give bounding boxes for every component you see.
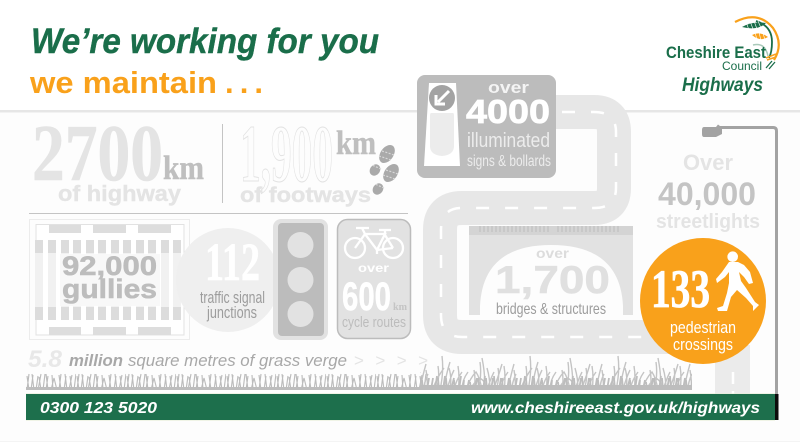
cycle label: cycle routes xyxy=(342,314,406,331)
sign label second line: signs & bollards xyxy=(467,153,551,170)
icon: traffic light xyxy=(273,219,328,340)
junctions number: 112 xyxy=(205,232,260,292)
panel: bridges and structures xyxy=(469,226,633,318)
icon: bollard xyxy=(424,83,460,166)
footer bar xyxy=(26,394,775,420)
sign number: 4000 xyxy=(466,93,550,130)
stat: streetlights: Over xyxy=(683,150,733,175)
gullies number: 92,000 xyxy=(62,251,157,281)
verge label: square metres of grass verge xyxy=(128,351,347,370)
stat: streetlights xyxy=(656,150,760,233)
highway unit: km xyxy=(163,150,204,187)
bridges label: bridges & structures xyxy=(496,301,606,318)
crossings label second line: crossings xyxy=(673,335,733,354)
footer phone: 0300 123 5020 xyxy=(40,400,157,417)
stat: grass verge: 5.8 xyxy=(28,346,63,373)
bridges over: over xyxy=(536,245,570,261)
stat: highway length: 2700 xyxy=(32,110,163,198)
crossings number: 133 xyxy=(651,259,710,319)
road graphic xyxy=(440,112,750,394)
logo wordmark: Cheshire East xyxy=(666,44,766,62)
icon: footprints xyxy=(367,142,402,197)
logo: Cheshire East Council Highways xyxy=(666,17,779,96)
panel: pedestrian crossings xyxy=(640,238,766,364)
icon: walking person xyxy=(716,251,759,311)
sign label: illuminated xyxy=(467,130,550,152)
crossings label: pedestrian xyxy=(670,318,736,337)
bridges number: 1,700 xyxy=(495,259,610,302)
divider xyxy=(222,124,223,203)
footway unit: km xyxy=(336,125,376,162)
logo highways: Highways xyxy=(682,75,763,96)
logo council: Council xyxy=(722,59,762,73)
junctions label: traffic signal xyxy=(200,288,265,307)
panel: cycle routes xyxy=(338,220,410,338)
streetlights number: 40,000 xyxy=(658,176,756,212)
section rule xyxy=(29,213,408,214)
panel: illuminated signs and bollards xyxy=(417,75,556,178)
cycle over: over xyxy=(358,261,389,275)
grate frame xyxy=(36,224,184,335)
gullies label: gullies xyxy=(62,274,157,304)
footer url: www.cheshireeast.gov.uk/highways xyxy=(471,400,760,417)
subtitle: . . . xyxy=(225,65,263,100)
icon: bicycle xyxy=(345,228,403,258)
verge emphasis: million xyxy=(69,351,123,370)
panel: gullies xyxy=(30,220,190,340)
subtitle: we maintain xyxy=(29,65,217,100)
grass strip xyxy=(26,354,692,390)
stat: footway length: 1,900 xyxy=(240,108,333,199)
sign text over: over xyxy=(488,78,529,97)
footway label: of footways xyxy=(240,184,371,207)
cycle unit: km xyxy=(393,301,407,313)
highway label: of highway xyxy=(58,181,182,206)
verge arrows: > > > > xyxy=(354,351,428,370)
stat: grass verge xyxy=(28,346,428,373)
logo emblem: wheat sheaf xyxy=(735,17,779,69)
panel: traffic signal junctions xyxy=(176,228,280,332)
title: We’re working for you xyxy=(31,22,379,61)
icon: street lamp xyxy=(702,124,778,420)
cycle number: 600 xyxy=(342,275,391,319)
junctions label second line: junctions xyxy=(206,303,257,322)
streetlights label: streetlights xyxy=(656,211,760,233)
